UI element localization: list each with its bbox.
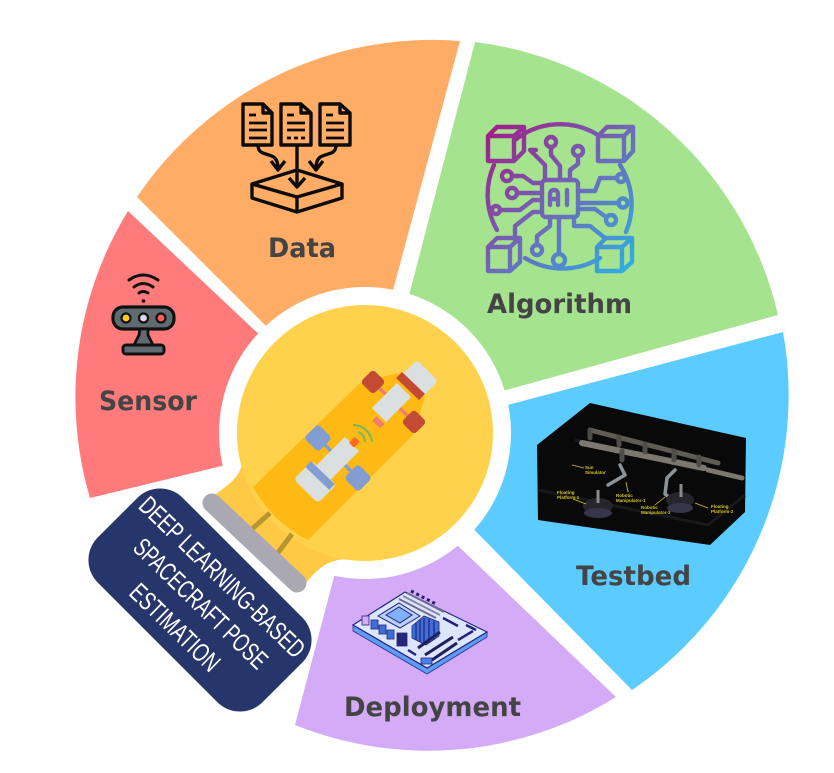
manipulators [608, 465, 675, 498]
title text: SPACECRAFT POSE [127, 532, 274, 675]
testbed labels: Floating [711, 504, 729, 509]
testbed labels: Platform-1 [557, 495, 580, 500]
testbed labels [557, 465, 734, 515]
testbed labels: Manipulator-1 [616, 498, 646, 503]
rails [582, 430, 742, 478]
bulb neck [216, 455, 346, 584]
io ports [362, 616, 407, 646]
orange band [253, 373, 425, 540]
icon: light bulb with rover [212, 305, 493, 584]
title pill [75, 475, 325, 725]
title text: DEEP LEARNING-BASED [133, 490, 311, 664]
heatsink [412, 616, 439, 645]
icon: sensor camera [113, 275, 174, 354]
rover top [360, 360, 438, 435]
ram slots [399, 591, 444, 618]
testbed labels: Robotic [641, 505, 658, 510]
icon: AI circuit [488, 124, 633, 271]
testbed labels: Manipulator-2 [641, 510, 671, 515]
icon: data documents into box [243, 104, 350, 212]
title text: ESTIMATION [124, 577, 226, 678]
label: Sensor: Sensor [99, 386, 198, 417]
title text [85, 490, 311, 713]
panel: sensor wedge [75, 211, 300, 498]
rover bottom [294, 424, 372, 503]
bulb white halo [190, 287, 511, 610]
bulb filaments [251, 513, 292, 554]
label: Data: Data [268, 233, 336, 264]
testbed labels: Floating [557, 490, 575, 495]
label: Deployment: Deployment [344, 692, 521, 723]
floating platforms [583, 484, 694, 518]
testbed labels: Simulator [585, 470, 606, 475]
image: testbed render [537, 403, 746, 545]
testbed labels: Robotic [616, 493, 633, 498]
testbed labels: Platform-2 [711, 509, 734, 514]
icon: motherboard [353, 591, 487, 674]
signal arcs [353, 425, 372, 442]
panel: algorithm wedge [400, 42, 778, 400]
label: Testbed: Testbed [576, 561, 691, 592]
panel: data wedge [137, 40, 460, 360]
testbed labels: Sun [585, 465, 594, 470]
bulb base bar [212, 503, 297, 583]
label: Algorithm: Algorithm [487, 289, 632, 320]
cpu socket [378, 603, 420, 628]
pci slots [418, 632, 457, 660]
bulb globe [237, 305, 493, 561]
panel: testbed wedge [440, 332, 789, 690]
panel: deployment wedge [295, 500, 616, 751]
